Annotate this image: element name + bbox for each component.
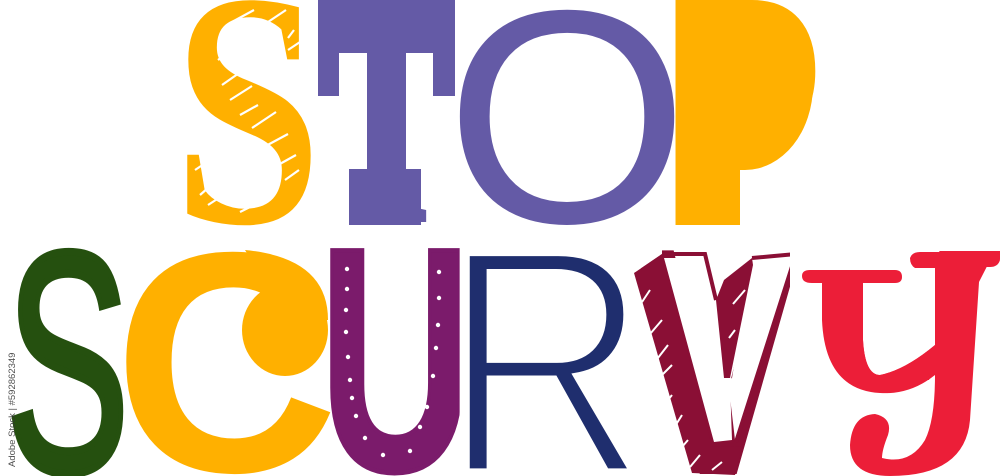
word: SCURVY xyxy=(6,100,1000,476)
stock watermark id: Adobe Stock | #592862349 xyxy=(7,353,18,467)
word: STOP xyxy=(173,0,824,295)
